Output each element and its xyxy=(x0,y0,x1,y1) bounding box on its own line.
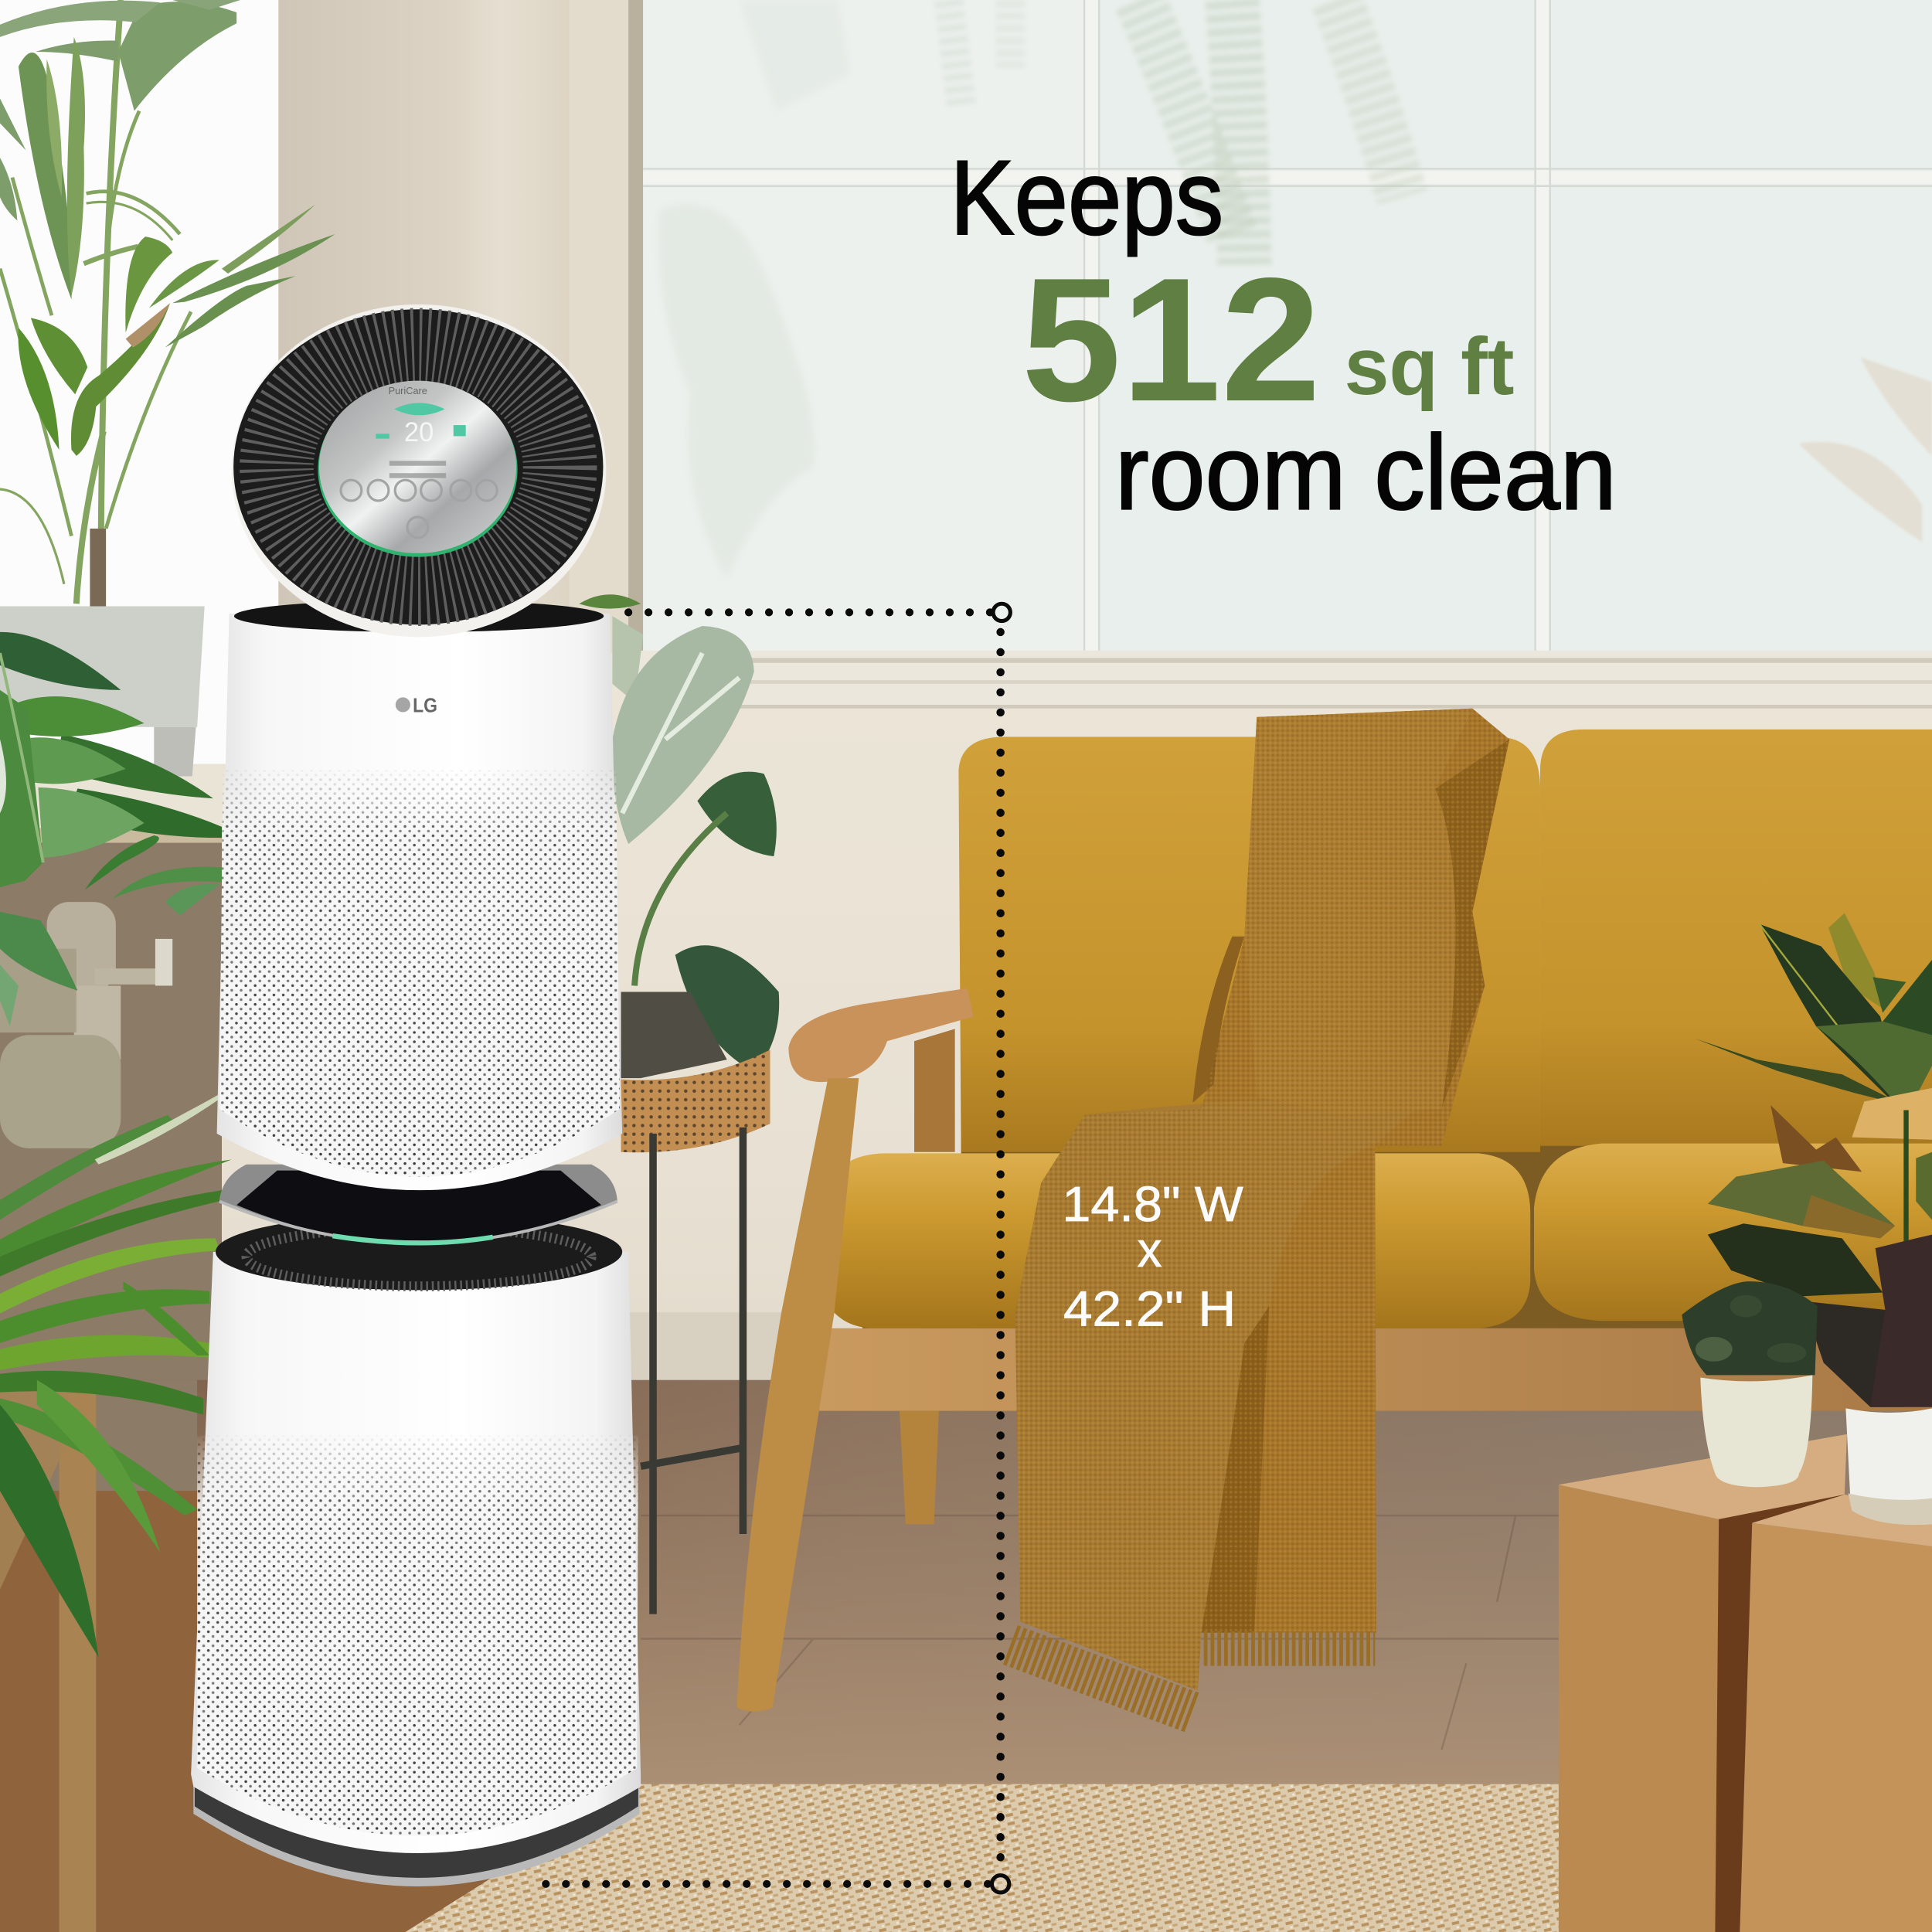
dimensions label: x xyxy=(1138,1222,1162,1277)
heading line: Keeps: Keeps xyxy=(950,139,1223,257)
side table with pot xyxy=(621,992,770,1614)
rotating fan head xyxy=(232,304,606,637)
window reflection: leaves xyxy=(658,0,850,579)
upper unit body xyxy=(217,614,622,1190)
throw fringe xyxy=(1010,1645,1375,1713)
heading xyxy=(950,139,1617,532)
plant: top left palm xyxy=(0,0,335,607)
lower unit base ring xyxy=(193,1787,639,1886)
silver control disc xyxy=(318,381,518,557)
lower grille xyxy=(247,1227,591,1287)
sofa back cushion left xyxy=(958,736,1540,1152)
sofa back cushion right xyxy=(1540,730,1932,1146)
throw texture xyxy=(1015,709,1509,1691)
heading unit: sq ft: sq ft xyxy=(1344,321,1515,412)
dimensions label: 14.8" W xyxy=(1062,1176,1243,1232)
LG logo xyxy=(396,696,437,717)
rug xyxy=(406,1784,1565,1932)
sofa wood frame xyxy=(813,1328,1932,1411)
plant pots: right xyxy=(1700,1375,1932,1525)
throw blanket xyxy=(1010,709,1509,1713)
silver control disc: PuriCare xyxy=(389,385,427,396)
upper perforated band xyxy=(219,770,620,1177)
heading line: room clean: room clean xyxy=(1115,413,1617,532)
plant: centre begonia xyxy=(579,594,779,1072)
plant pot: top left xyxy=(0,606,205,776)
radial grille slats xyxy=(277,345,560,589)
sofa xyxy=(736,730,1932,1712)
heading number: 512: 512 xyxy=(1022,242,1321,438)
wooden block table xyxy=(1559,1434,1932,1932)
window with panes xyxy=(643,0,1932,653)
dimension line: dotted bracket xyxy=(546,604,1010,1893)
silver control disc: 20 xyxy=(404,417,434,447)
lower perforated band xyxy=(197,1435,638,1836)
window reflection: right leaf xyxy=(1799,357,1932,543)
control buttons xyxy=(341,480,497,538)
upper unit opening xyxy=(234,600,604,632)
window reflection: ferns xyxy=(949,0,1402,265)
sofa base shadow xyxy=(862,1140,1932,1343)
middle disc xyxy=(219,1165,617,1243)
window sill xyxy=(631,651,1932,709)
dimensions label: 42.2" H xyxy=(1063,1281,1236,1337)
sofa arm and leg xyxy=(788,988,974,1082)
plant: lower left grass xyxy=(0,1094,232,1932)
plant: left leaf cluster xyxy=(0,632,222,1026)
plant: right croton xyxy=(1682,913,1932,1407)
lower unit opening xyxy=(216,1213,622,1290)
armchair behind plants xyxy=(0,902,172,1148)
sofa seat cushion right xyxy=(1534,1144,1932,1321)
air purifier xyxy=(191,304,641,1886)
dimensions label xyxy=(1062,1176,1243,1337)
lower unit body xyxy=(191,1252,641,1853)
LG logo: LG xyxy=(413,696,437,717)
sofa seat cushion left xyxy=(813,1153,1530,1328)
